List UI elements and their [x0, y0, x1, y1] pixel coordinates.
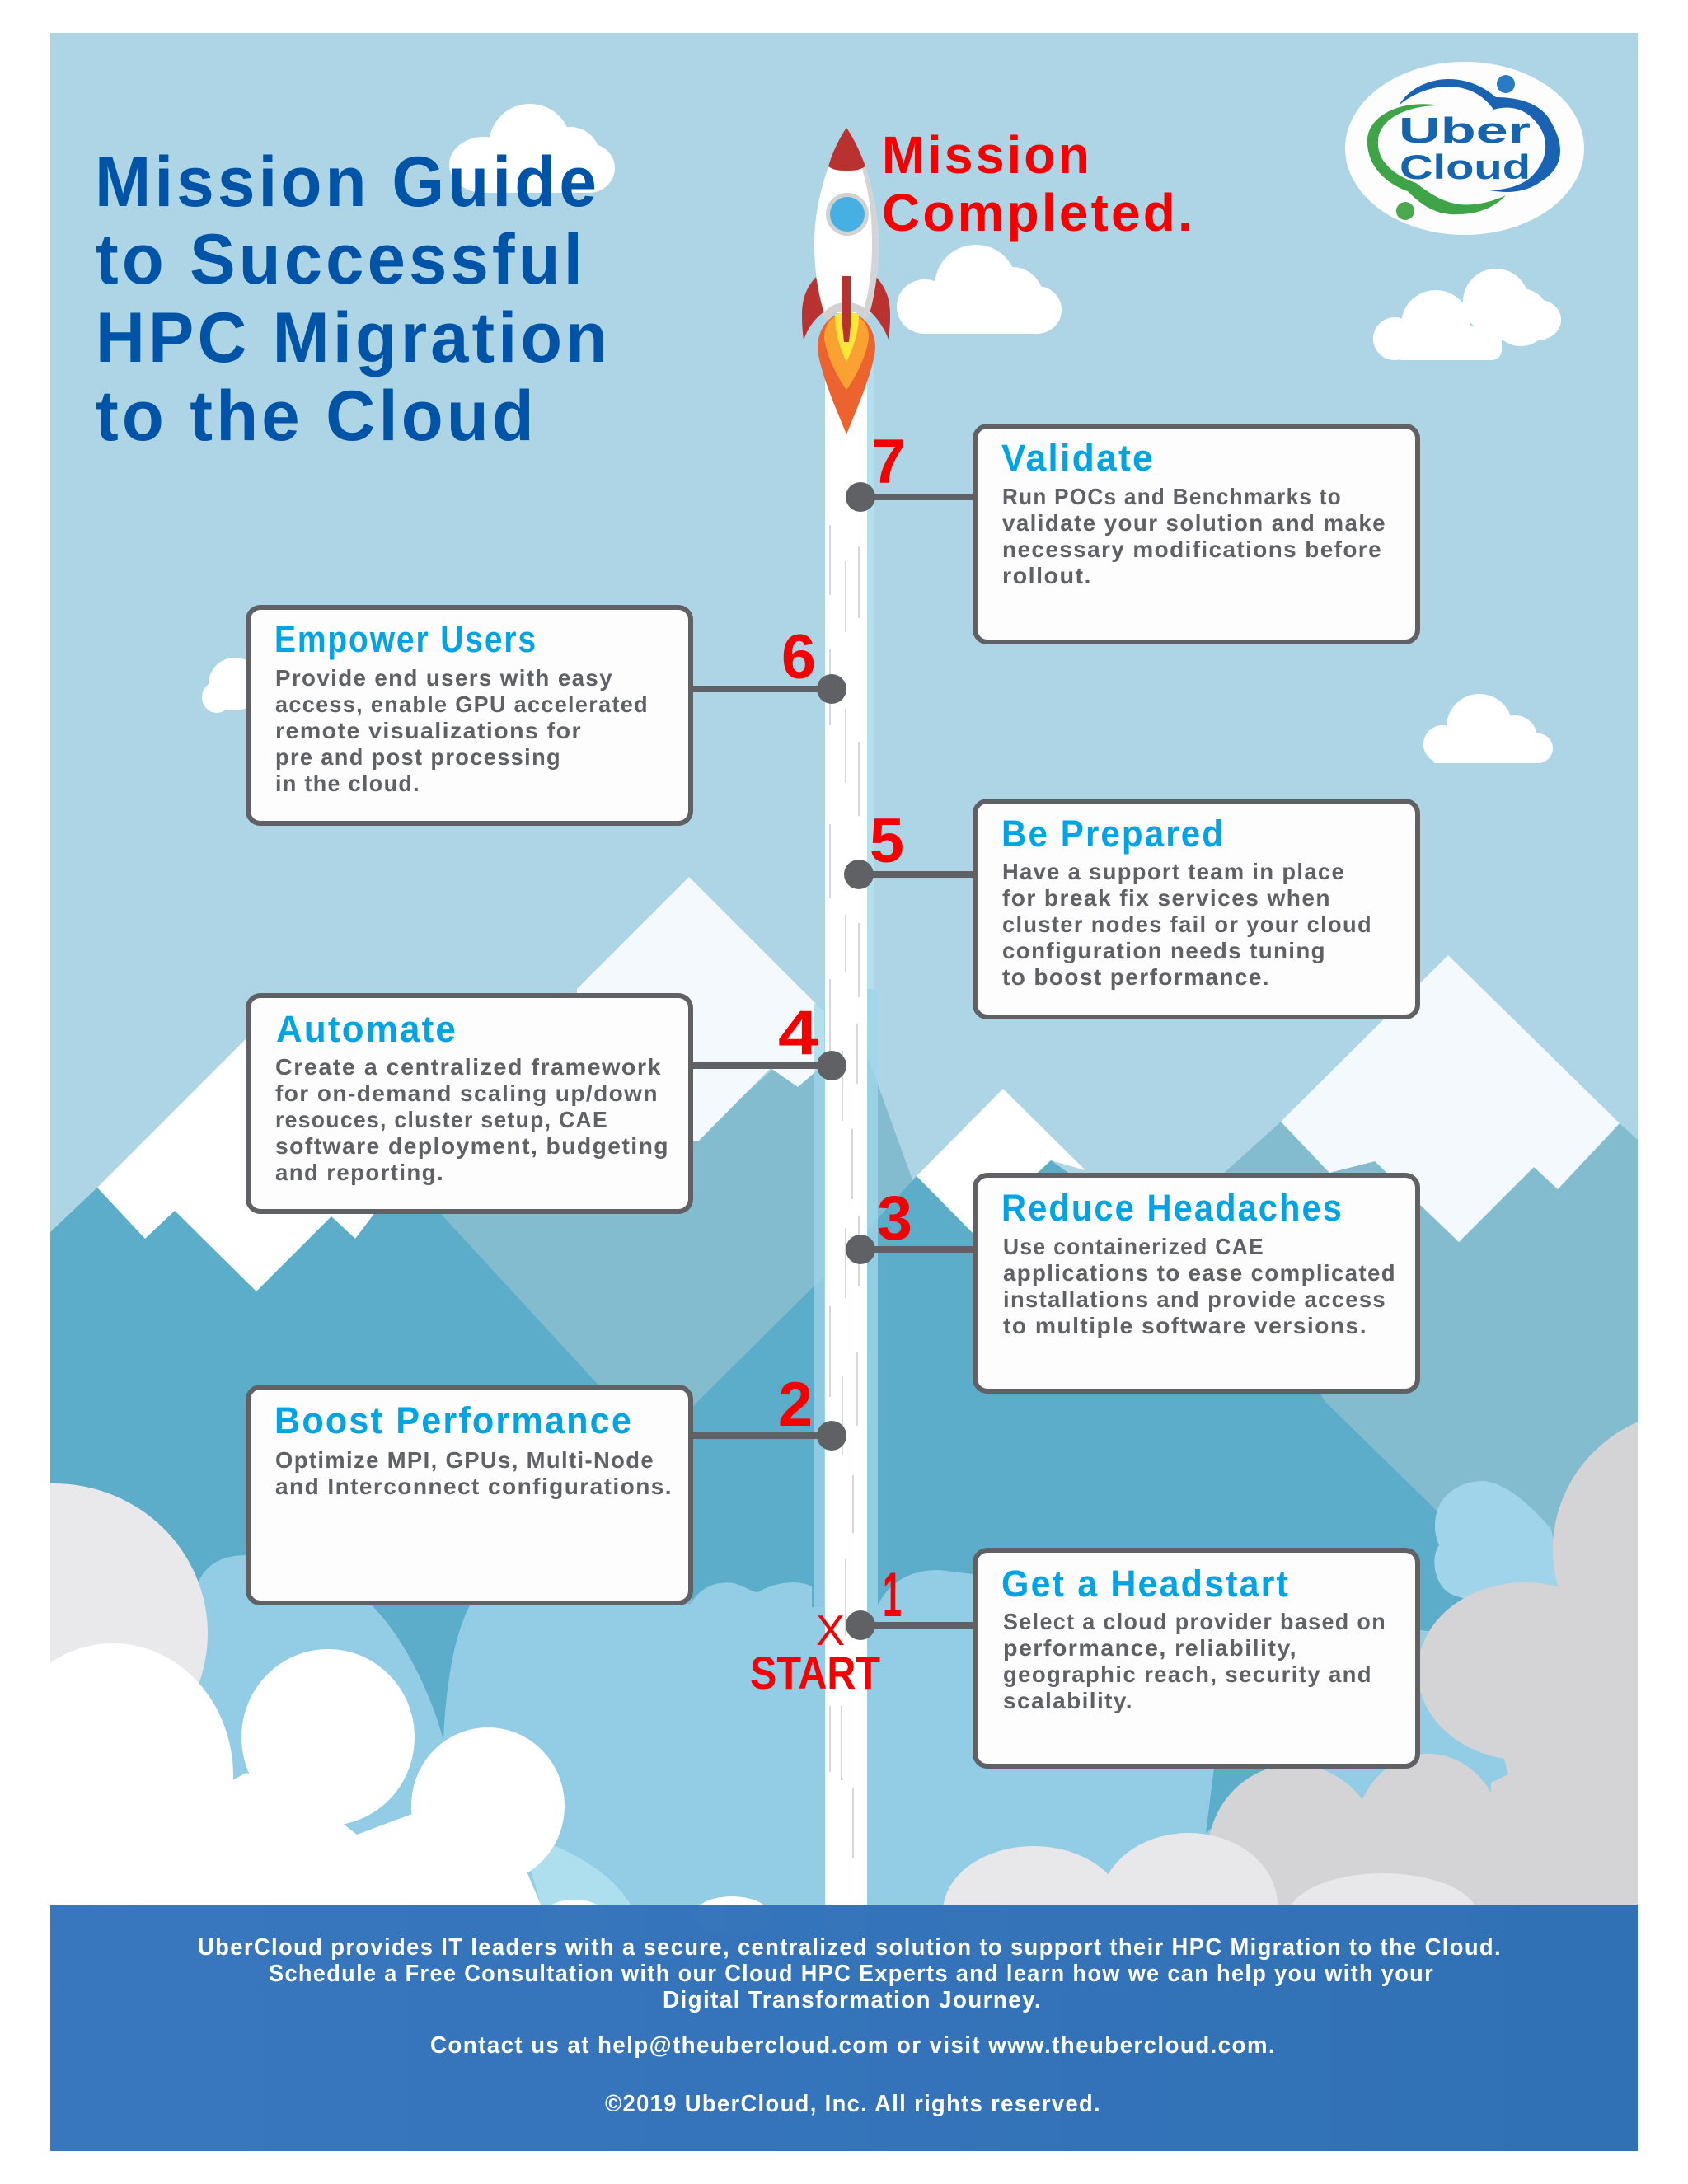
step 1: Get a Headstart: Select a cloud provider based on	[1003, 1609, 1386, 1634]
small clouds	[202, 104, 1561, 763]
step 6: Empower Users: 6	[781, 622, 816, 692]
step 1: Get a Headstart: Get a Headstart	[1001, 1563, 1290, 1605]
mission completed: Completed.	[882, 183, 1195, 242]
mission completed	[882, 125, 1195, 242]
step 2: Boost Performance: and Interconnect configurations.	[275, 1474, 673, 1499]
footer text	[198, 1934, 1502, 2117]
step 1: Get a Headstart: 1	[883, 1560, 902, 1630]
step 6: Empower Users: Provide end users with easy	[275, 665, 613, 691]
step 5: Be Prepared	[844, 801, 1418, 1017]
step 6: Empower Users: Empower Users	[274, 618, 537, 660]
title: to Successful	[96, 220, 586, 299]
start marker: START	[750, 1647, 880, 1699]
footer text: ©2019 UberCloud, Inc. All rights reserved.	[605, 2091, 1101, 2117]
step 7: Validate: validate your solution and make	[1002, 510, 1386, 536]
step 3: Reduce Headaches: applications to ease complicated	[1003, 1260, 1396, 1286]
step 7: Validate: 7	[871, 427, 906, 497]
title: Mission Guide	[95, 143, 600, 222]
start marker: X	[816, 1607, 845, 1655]
title: to the Cloud	[96, 377, 537, 456]
step 7: Validate: Validate	[1001, 437, 1155, 479]
step 7: Validate: Run POCs and Benchmarks to	[1002, 484, 1342, 509]
step 1: Get a Headstart: performance, reliability,	[1003, 1635, 1297, 1661]
step 6: Empower Users: in the cloud.	[275, 771, 420, 796]
step 2: Boost Performance: Boost Performance	[274, 1399, 633, 1441]
step 6: Empower Users: access, enable GPU accelerated	[275, 691, 649, 717]
step 4: Automate: 4	[778, 998, 818, 1068]
step 1: Get a Headstart	[846, 1550, 1418, 1766]
footer band	[50, 1905, 1638, 2151]
step 3: Reduce Headaches	[846, 1175, 1418, 1391]
step 2: Boost Performance: Optimize MPI, GPUs, Multi-Node	[275, 1447, 654, 1473]
rocket trail	[825, 330, 867, 1937]
step 4: Automate: Create a centralized framework	[275, 1054, 662, 1080]
step 3: Reduce Headaches: Reduce Headaches	[1001, 1187, 1343, 1229]
footer text: Contact us at help@theubercloud.com or visit www.theubercloud.com.	[430, 2032, 1276, 2059]
step 6: Empower Users	[248, 607, 846, 823]
ground clouds	[50, 1422, 1638, 1905]
step 4: Automate: Automate	[276, 1008, 457, 1050]
step 5: Be Prepared: 5	[870, 806, 904, 876]
step 6: Empower Users: pre and post processing	[275, 744, 561, 770]
footer text: UberCloud provides IT leaders with a secure, centralized solution to support their HPC Migration to the Cloud.	[198, 1934, 1502, 1961]
step 5: Be Prepared: Have a support team in place	[1002, 859, 1345, 884]
step 6: Empower Users: remote visualizations for	[275, 718, 582, 743]
icon: rocket	[802, 128, 890, 434]
step 1: Get a Headstart: scalability.	[1003, 1688, 1133, 1713]
logo: UberCloud: Cloud	[1400, 148, 1531, 186]
mission completed: Mission	[882, 125, 1092, 185]
rocket trail glow	[814, 330, 878, 1663]
step 3: Reduce Headaches: 3	[877, 1183, 912, 1254]
logo: UberCloud	[1345, 62, 1584, 235]
step 5: Be Prepared: for break fix services when	[1002, 885, 1331, 911]
step 3: Reduce Headaches: installations and provide access	[1003, 1286, 1386, 1312]
step 4: Automate: resouces, cluster setup, CAE	[275, 1107, 608, 1132]
title: HPC Migration	[96, 298, 611, 377]
step 4: Automate: software deployment, budgeting	[275, 1133, 669, 1159]
step 3: Reduce Headaches: Use containerized CAE	[1003, 1234, 1264, 1259]
mountains	[50, 877, 1638, 1632]
start marker	[750, 1607, 880, 1699]
step 7: Validate: necessary modifications before	[1002, 537, 1382, 562]
step 4: Automate: and reporting.	[275, 1160, 444, 1185]
title	[95, 143, 611, 456]
step 5: Be Prepared: configuration needs tuning	[1002, 938, 1326, 963]
step 4: Automate: for on-demand scaling up/down	[275, 1080, 659, 1106]
step 1: Get a Headstart: geographic reach, security and	[1003, 1661, 1372, 1687]
step 2: Boost Performance: 2	[778, 1370, 813, 1440]
step 7: Validate	[846, 426, 1418, 642]
step 4: Automate	[248, 996, 846, 1212]
footer text: Digital Transformation Journey.	[663, 1987, 1042, 2013]
step 3: Reduce Headaches: to multiple software versions.	[1003, 1313, 1367, 1338]
footer text: Schedule a Free Consultation with our Cloud HPC Experts and learn how we can help you with your	[269, 1961, 1434, 1987]
step 7: Validate: rollout.	[1002, 563, 1092, 588]
step 5: Be Prepared: to boost performance.	[1002, 964, 1270, 990]
step 2: Boost Performance	[248, 1370, 846, 1603]
step 5: Be Prepared: cluster nodes fail or your cloud	[1002, 912, 1372, 937]
step 5: Be Prepared: Be Prepared	[1001, 813, 1225, 855]
logo: UberCloud: Uber	[1399, 110, 1531, 151]
